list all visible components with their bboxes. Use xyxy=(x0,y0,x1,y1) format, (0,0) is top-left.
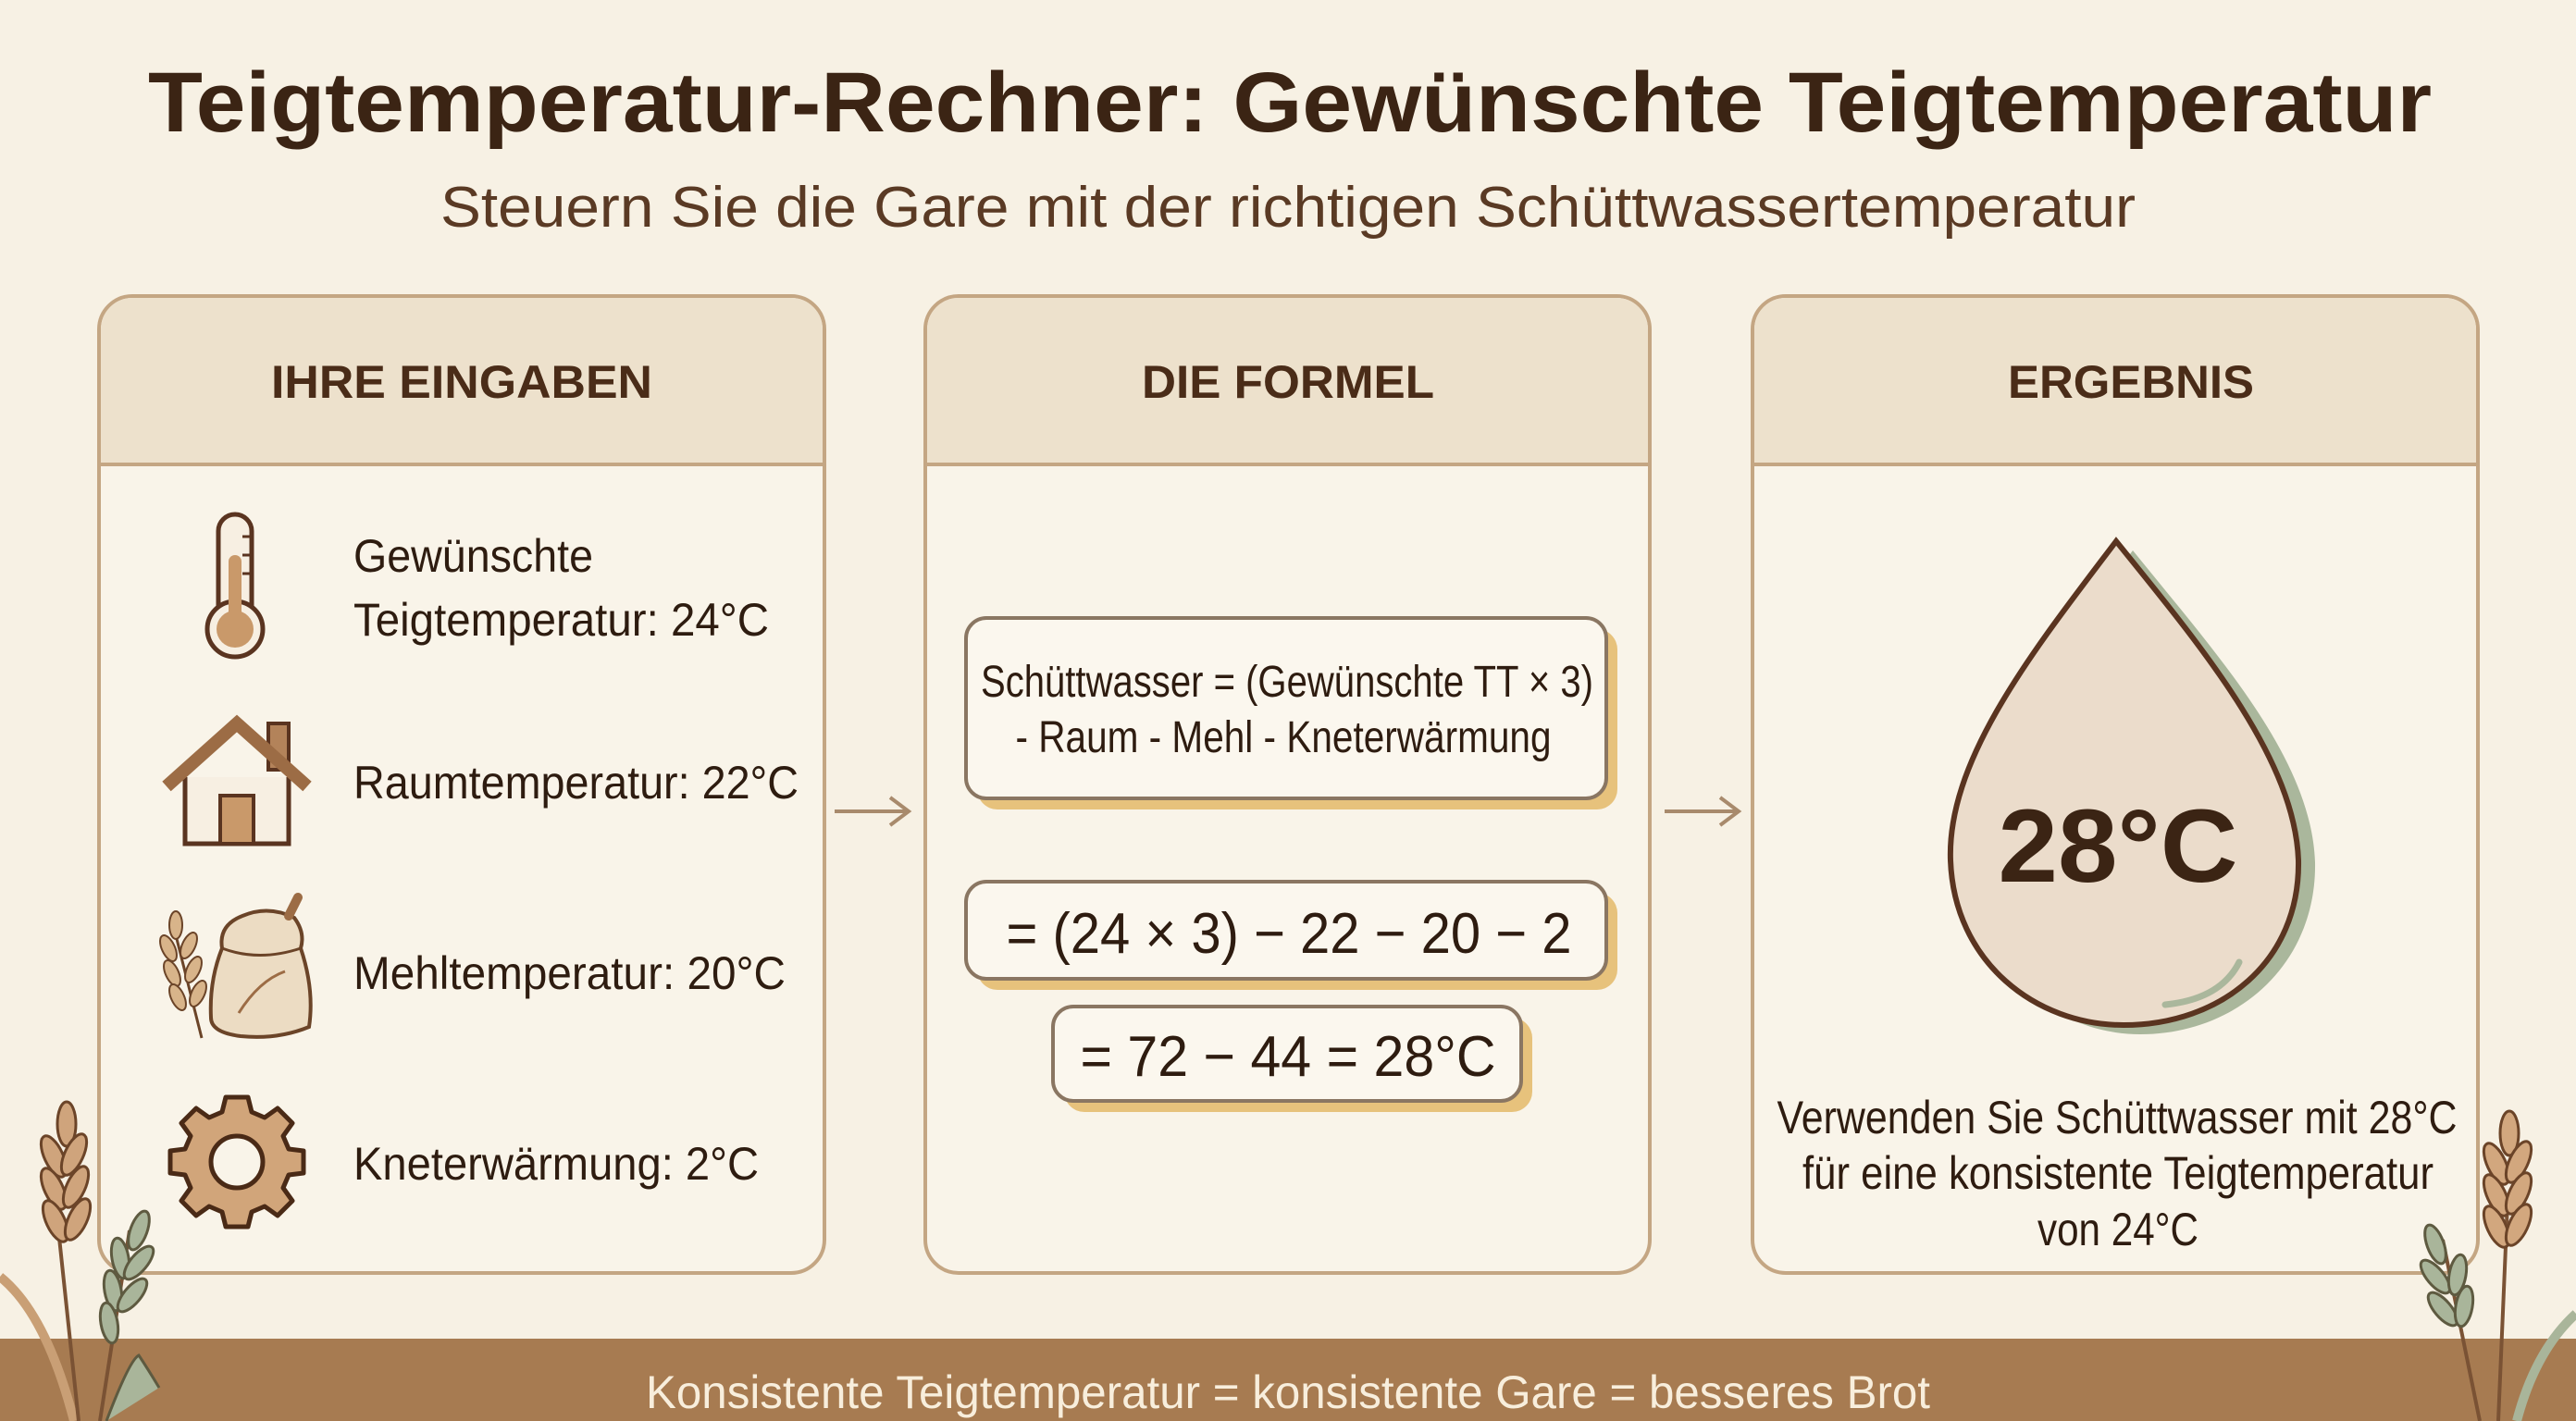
text: desired dough temp: Gewünschte xyxy=(353,530,593,582)
result text: von 24°C xyxy=(2037,1204,2198,1255)
decoration: wheat left xyxy=(0,1102,159,1421)
result text: für eine konsistente Teigtemperatur xyxy=(1802,1147,2434,1199)
footer band xyxy=(0,1339,2576,1421)
arrow 1 xyxy=(835,797,909,825)
formula box: general: Schüttwasser = (Gewünschte TT × 3) xyxy=(981,658,1593,707)
text: flour temp: Mehltemperatur: 20°C xyxy=(353,947,786,999)
heading: inputs: IHRE EINGABEN xyxy=(271,356,652,408)
panel: result xyxy=(1752,296,2478,1273)
panel: formula xyxy=(925,296,1650,1273)
panel: inputs: Teigtemperatur: 24°C xyxy=(353,594,769,646)
result text xyxy=(1777,1092,2458,1255)
decoration: wheat right xyxy=(2416,1111,2576,1421)
heading: formula: DIE FORMEL xyxy=(1142,356,1434,408)
icon: gear xyxy=(170,1097,303,1227)
title: Teigtemperatur-Rechner: Gewünschte Teigtemperatur xyxy=(148,56,2432,150)
formula box: result: = 72 − 44 = 28°C xyxy=(1081,1025,1495,1089)
text: room temp: Raumtemperatur: 22°C xyxy=(353,757,799,809)
text: kneading heat: Kneterwärmung: 2°C xyxy=(353,1138,759,1190)
heading: result: ERGEBNIS xyxy=(2008,356,2254,408)
arrow 2 xyxy=(1665,797,1739,825)
formula box: substitution xyxy=(966,882,1617,990)
icon: water drop with result: 28°C xyxy=(1999,788,2237,904)
panel: inputs xyxy=(99,296,824,1273)
formula box: substitution: = (24 × 3) − 22 − 20 − 2 xyxy=(1007,902,1571,966)
footer band: Konsistente Teigtemperatur = konsistente Gare = besseres Brot xyxy=(646,1366,1930,1418)
icon: water drop with result xyxy=(1951,541,2315,1034)
formula box: general xyxy=(966,618,1617,809)
formula box: result xyxy=(1053,1007,1532,1112)
icon: thermometer xyxy=(207,514,263,657)
formula box: general: - Raum - Mehl - Kneterwärmung xyxy=(1016,713,1551,762)
subtitle: Steuern Sie die Gare mit der richtigen Schüttwassertemperatur xyxy=(440,176,2136,240)
icon: flour sack with wheat xyxy=(156,897,311,1038)
icon: house xyxy=(167,723,307,844)
result text: Verwenden Sie Schüttwasser mit 28°C xyxy=(1777,1092,2458,1143)
